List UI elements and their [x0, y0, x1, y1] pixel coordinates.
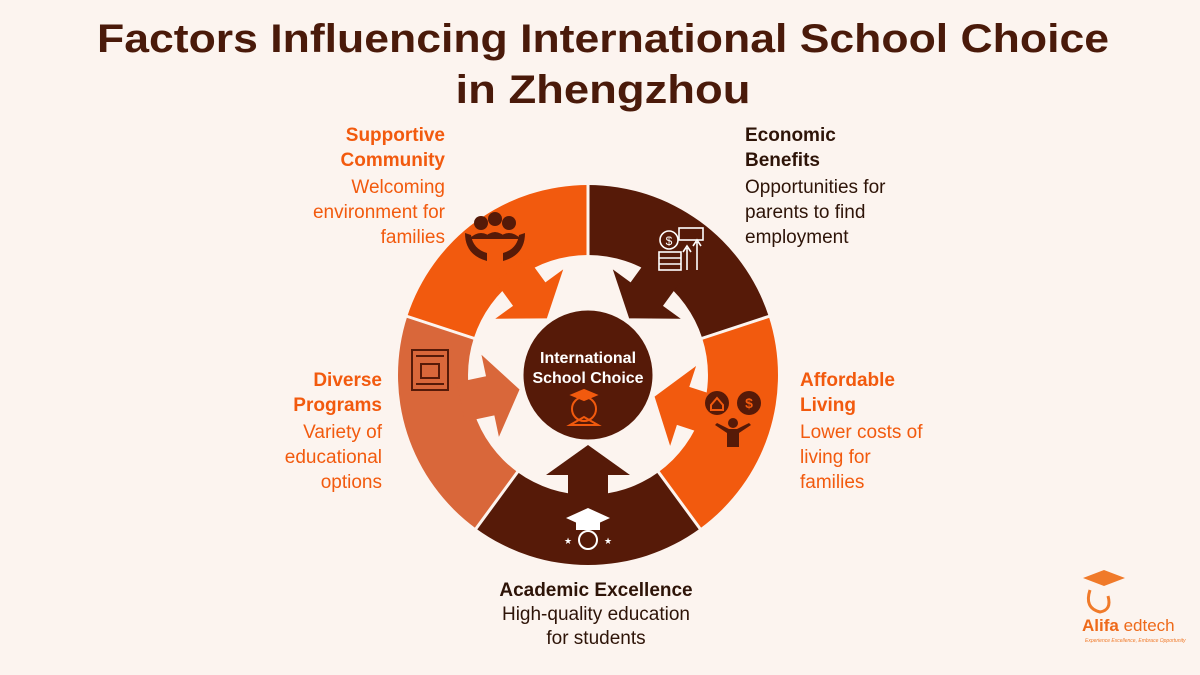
text: affordable living: Living: [800, 395, 856, 416]
text: academic excellence: High-quality education: [502, 604, 690, 625]
text: affordable living: [800, 370, 923, 493]
text: academic excellence: for students: [546, 628, 646, 649]
text: economic benefits: parents to find: [745, 202, 865, 223]
text: economic benefits: Benefits: [745, 150, 820, 171]
icon: affordable living: [705, 391, 761, 447]
title: in Zhengzhou: [456, 68, 750, 112]
icon: academic medal cap: ★: [604, 536, 612, 546]
icon: economic chart: $: [666, 234, 673, 248]
separators: [406, 183, 770, 530]
arrow: supportive: [478, 245, 581, 343]
title: [97, 17, 1109, 112]
segment: supportive community: [407, 185, 588, 338]
icon: affordable living: $: [745, 395, 753, 411]
text: diverse programs: Diverse: [313, 370, 382, 391]
ring diagram: [398, 183, 778, 565]
icon: academic medal cap: [564, 508, 612, 549]
text: affordable living: Lower costs of: [800, 422, 923, 443]
logo: Alifa edtech: Experience Excellence, Embrace Opportunity: [1085, 638, 1186, 644]
title: Factors Influencing International School Choice: [97, 17, 1109, 61]
text: diverse programs: Programs: [293, 395, 382, 416]
segment: affordable living: [658, 316, 778, 529]
icon: globe graduate: [570, 390, 598, 425]
text: supportive community: environment for: [313, 202, 446, 223]
text: academic excellence: [499, 580, 693, 649]
text: supportive community: Welcoming: [351, 177, 445, 198]
segment: diverse programs: [398, 316, 518, 529]
text: academic excellence: Academic Excellence: [499, 580, 693, 601]
center circle: School Choice: [532, 370, 644, 387]
text: economic benefits: Economic: [745, 125, 836, 146]
icon: diverse programs: [412, 350, 448, 390]
text: diverse programs: [285, 370, 383, 493]
arrow: diverse: [452, 348, 528, 443]
text: diverse programs: options: [321, 472, 382, 493]
text: economic benefits: Opportunities for: [745, 177, 886, 198]
text: supportive community: Community: [340, 150, 445, 171]
text: economic benefits: [745, 125, 886, 248]
arrow: economic: [595, 245, 698, 343]
segment: academic excellence: [476, 472, 700, 565]
arrow: affordable: [642, 357, 725, 455]
logo: Alifa edtech: Alifa edtech: [1082, 616, 1175, 635]
icon: community people hands: [465, 212, 525, 261]
text: supportive community: [313, 125, 446, 248]
text: supportive community: Supportive: [346, 125, 445, 146]
center circle: [522, 309, 654, 441]
icon: academic medal cap: ★: [564, 536, 572, 546]
center circle: International: [540, 350, 636, 367]
text: affordable living: families: [800, 472, 864, 493]
text: economic benefits: employment: [745, 227, 849, 248]
text: supportive community: families: [381, 227, 445, 248]
segment: economic benefits: [588, 185, 769, 338]
arrow: academic: [546, 445, 630, 505]
text: diverse programs: educational: [285, 447, 382, 468]
text: affordable living: living for: [800, 447, 871, 468]
text: diverse programs: Variety of: [303, 422, 383, 443]
logo: Alifa edtech: [1082, 570, 1186, 644]
text: affordable living: Affordable: [800, 370, 895, 391]
icon: economic chart: [659, 228, 703, 270]
